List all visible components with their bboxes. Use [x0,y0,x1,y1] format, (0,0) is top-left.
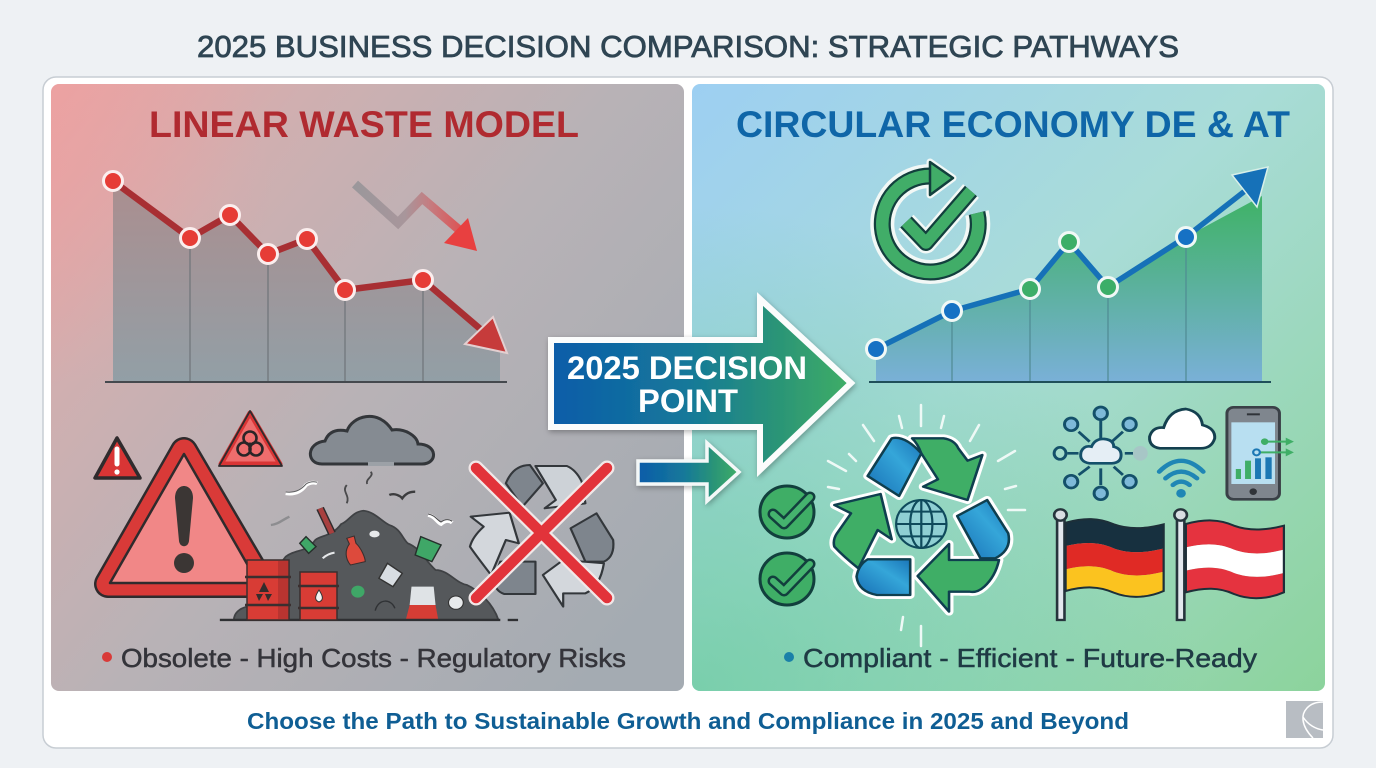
rising line chart [866,167,1271,382]
arrow: 2025 decision point: POINT [638,383,738,419]
icon: crossed-out recycling symbol [470,465,613,607]
heading: linear waste model: LINEAR WASTE MODEL [149,104,579,145]
icon: white cloud [1150,409,1215,448]
caption: circular economy: Compliant - Efficient - Future-Ready [803,643,1257,673]
arrow: secondary transition arrow [638,443,739,501]
icon: small downward trend arrow [355,184,477,251]
icon: cloud network [1054,407,1148,500]
icon: small warning triangle [95,438,140,478]
icon: radioactive barrel [245,560,291,620]
icon: wifi [1159,461,1203,496]
icon: check badge upper [760,486,814,538]
title: 2025 BUSINESS DECISION COMPARISON: STRATEGIC PATHWAYS [197,29,1179,64]
icon: Austrian flag [1174,509,1284,620]
heading: circular economy: CIRCULAR ECONOMY DE & AT [736,104,1290,145]
icon: oil barrel [298,572,339,620]
arrow: 2025 decision point [551,299,851,470]
icon: biohazard triangle [219,411,282,466]
logo mark [1286,701,1323,738]
icon: waste pile [220,508,518,620]
icon: smartphone with chart [1227,407,1294,499]
icon: globe [896,500,946,548]
icon: circular check badge [882,162,978,272]
icon: German flag [1054,509,1164,620]
icon: check badge lower [760,553,814,605]
arrow: 2025 decision point: 2025 DECISION [567,350,807,386]
declining line chart [104,172,507,382]
panel: circular economy [692,84,1325,691]
icon: recycling symbol with globe [834,438,1009,612]
birds and fumes [271,472,452,525]
sparkle rays [828,405,1025,646]
icon: large warning triangle [108,451,262,584]
panel: linear waste model [51,84,684,691]
icon: smog cloud [310,416,434,464]
caption: linear model: Obsolete - High Costs - Regulatory Risks [121,643,626,673]
footer tagline: Choose the Path to Sustainable Growth and Compliance in 2025 and Beyond [247,708,1129,734]
